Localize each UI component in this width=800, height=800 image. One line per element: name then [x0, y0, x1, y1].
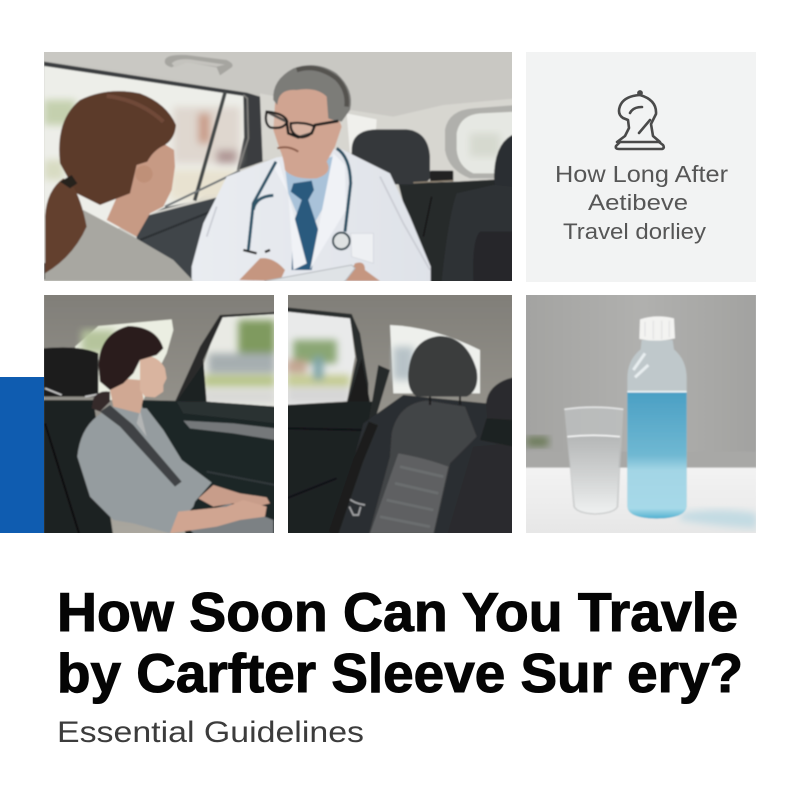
panel: water bottle and glass — [525, 293, 757, 536]
subtitle: Essential Guidelines — [57, 716, 364, 749]
water bottle — [627, 316, 687, 519]
panel: doctor consulting patient in car — [40, 50, 517, 283]
panel: empty back seat — [287, 293, 513, 537]
title: by Carfter Sleeve Sur ery? — [57, 642, 743, 704]
panel: title card — [526, 52, 756, 282]
water glass — [564, 407, 623, 515]
icon: chess knight — [616, 91, 664, 149]
text: card heading — [555, 161, 728, 244]
accent: blue block — [0, 377, 44, 533]
text: card heading: How Long After — [555, 161, 728, 187]
title: How Soon Can You Travle — [57, 581, 738, 643]
text: card heading: Aetibeve — [588, 190, 688, 215]
panel: woman seated in back seat — [43, 293, 277, 537]
title — [57, 581, 743, 704]
doctor — [192, 65, 431, 283]
seated woman — [77, 326, 273, 537]
text: card heading: Travel dorliey — [563, 219, 706, 244]
patient seen from behind — [45, 91, 193, 281]
